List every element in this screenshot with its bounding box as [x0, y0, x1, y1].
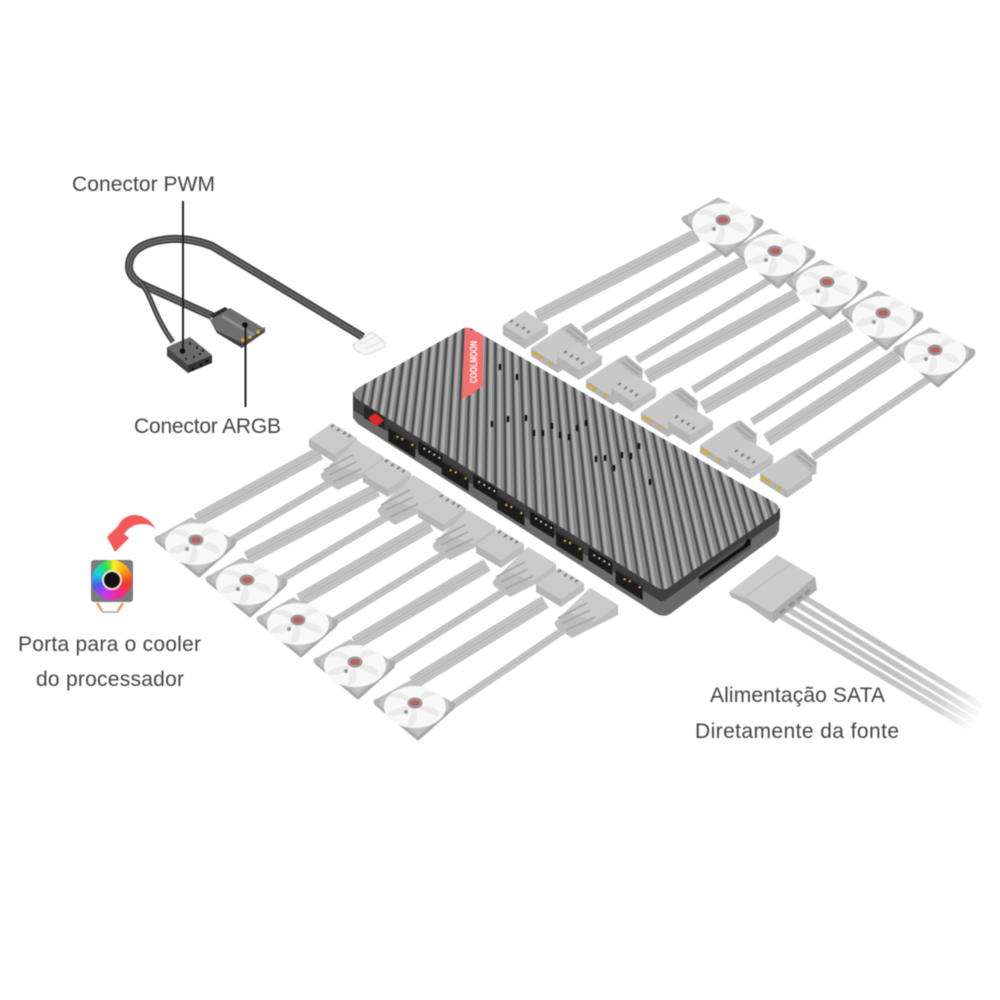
label: Porta para o cooler do processador: do processador	[36, 668, 184, 691]
label: Alimentação SATA Diretamente da fonte: Diretamente da fonte	[695, 720, 899, 743]
white cable connector	[353, 332, 385, 355]
fan ports	[387, 425, 644, 600]
hub finned top plate	[353, 327, 780, 590]
SATA slot	[698, 538, 751, 584]
fan cables	[197, 235, 930, 707]
SATA power cable	[781, 598, 983, 730]
arrow: to CPU cooler	[107, 515, 156, 552]
label: Alimentação SATA Diretamente da fonte: Alimentação SATA	[710, 684, 885, 707]
hub side faces	[353, 392, 780, 616]
label: Conector PWM: Conector PWM	[72, 173, 215, 196]
COOLMOON ribbon	[462, 327, 483, 399]
COOLMOON ribbon: COOLMOON	[468, 341, 480, 383]
label: Porta para o cooler do processador	[18, 633, 201, 691]
connectors: lower left row	[309, 423, 618, 638]
SATA power connector	[729, 555, 817, 623]
ARGB connector	[210, 307, 265, 348]
callout line: ARGB	[242, 322, 248, 407]
PWM connector	[167, 337, 212, 373]
icon: RGB CPU cooler	[90, 559, 134, 614]
callout line: PWM	[180, 201, 185, 354]
fans: lower left row	[154, 519, 456, 739]
fans: upper right row	[682, 199, 976, 386]
label: Conector ARGB: Conector ARGB	[134, 415, 281, 438]
label: Porta para o cooler do processador: Porta para o cooler	[18, 633, 201, 656]
PWM and ARGB adapter cable	[129, 239, 363, 342]
hub	[352, 326, 781, 616]
label: Alimentação SATA Diretamente da fonte	[695, 684, 899, 743]
connectors: upper right row	[503, 311, 817, 498]
red switch port	[364, 405, 385, 430]
